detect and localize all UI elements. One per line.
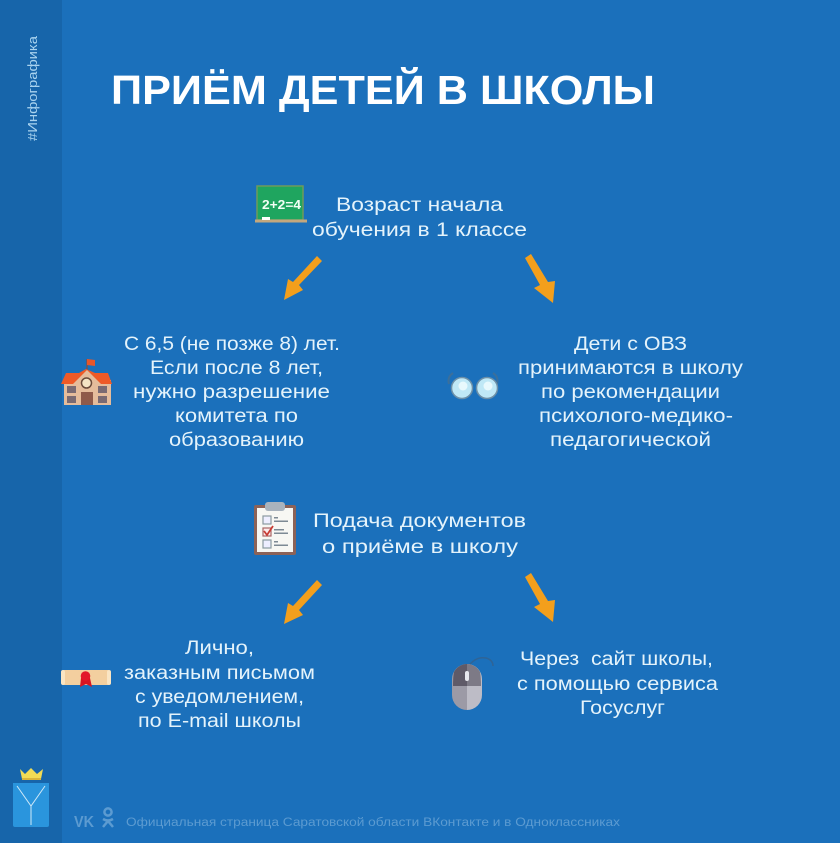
text: children with disabilities: [518, 334, 744, 451]
text: in person, by mail: Лично,: [185, 638, 254, 659]
arrow: age left: [284, 256, 322, 300]
text: online via Gosuslugi: Через сайт школы,: [520, 649, 713, 670]
icon: clipboard: [254, 502, 296, 555]
heading: school age: Возраст начала: [336, 195, 504, 216]
text: in person, by mail: заказным письмом: [124, 663, 315, 684]
icon: diploma scroll: [61, 670, 111, 687]
icon: Saratov region emblem: [13, 768, 49, 827]
icon: VK logo: VK: [74, 814, 94, 831]
title: ПРИЁМ ДЕТЕЙ В ШКОЛЫ: [111, 67, 655, 113]
text: online via Gosuslugi: Госуслуг: [580, 698, 665, 719]
text: in person, by mail: по E-mail школы: [138, 711, 301, 732]
arrow: age right: [525, 254, 555, 303]
text: online via Gosuslugi: с помощью сервиса: [517, 674, 718, 695]
icon: chalkboard: 2+2=4: [262, 197, 302, 212]
heading: school age: обучения в 1 классе: [312, 220, 527, 241]
icon: chalkboard: [255, 186, 307, 222]
text: age from 6.5: комитета по: [175, 406, 298, 427]
text: children with disabilities: принимаются в школу: [518, 358, 744, 379]
text: online via Gosuslugi: [517, 649, 718, 719]
text: children with disabilities: Дети с ОВЗ: [574, 334, 687, 355]
text: age from 6.5: образованию: [169, 430, 304, 451]
text: children with disabilities: педагогической: [550, 430, 711, 451]
heading: submitting documents: Подача документов: [313, 511, 526, 532]
sidebar: [0, 0, 62, 843]
text: in person, by mail: [124, 638, 315, 732]
icon: glasses: [448, 373, 498, 398]
heading: school age: [312, 195, 527, 241]
heading: submitting documents: [313, 511, 526, 558]
arrow: documents left: [284, 580, 322, 624]
icon: Odnoklassniki logo: [103, 808, 113, 827]
icon: school building: [61, 359, 112, 405]
text: age from 6.5: нужно разрешение: [133, 382, 330, 403]
sidebar hashtag: #Инфографика: [26, 36, 40, 141]
text: age from 6.5: Если после 8 лет,: [150, 358, 323, 379]
text: age from 6.5: С 6,5 (не позже 8) лет.: [124, 334, 340, 355]
text: age from 6.5: [124, 334, 340, 451]
text: children with disabilities: по рекомендации: [541, 382, 720, 403]
icon: computer mouse: [452, 658, 493, 710]
text: children with disabilities: психолого-медико-: [539, 406, 733, 427]
heading: submitting documents: о приёме в школу: [322, 537, 519, 558]
text: in person, by mail: с уведомлением,: [135, 687, 304, 708]
footer caption: Официальная страница Саратовской области ВКонтакте и в Одноклассниках: [126, 817, 620, 829]
arrow: documents right: [525, 573, 555, 622]
